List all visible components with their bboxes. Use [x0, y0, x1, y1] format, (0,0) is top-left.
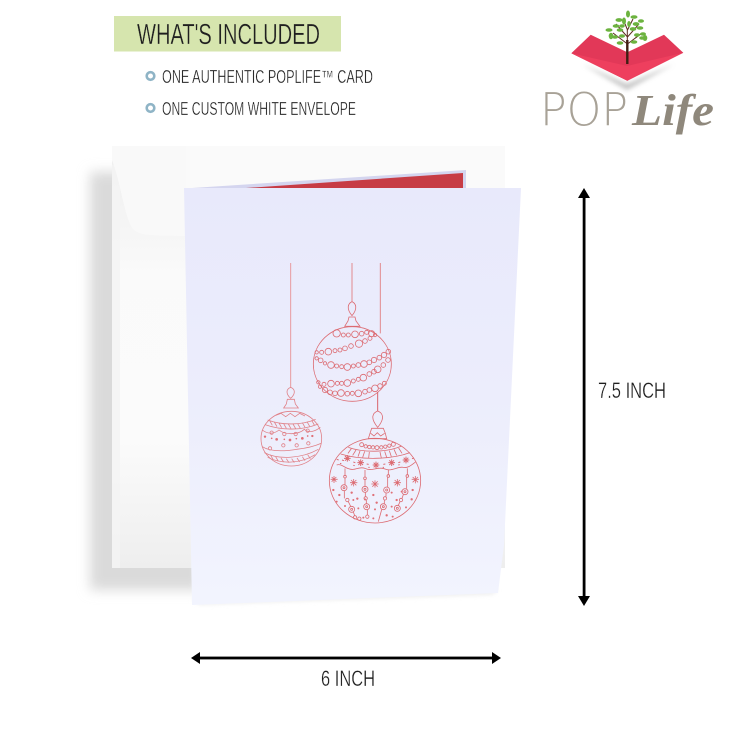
logo: PopLife [540, 10, 714, 136]
icon: book shadow [582, 64, 674, 90]
icon: tree [606, 10, 647, 64]
logo word: POP: POP [540, 84, 628, 136]
item: envelope [147, 99, 356, 119]
arrow: height [578, 188, 590, 606]
logo word: Life: Life [631, 86, 714, 135]
list: included items [147, 67, 373, 119]
card shadow [192, 590, 498, 604]
item: card [147, 67, 373, 87]
ornament: large snowflake ball [329, 392, 421, 523]
item: card: ONE AUTHENTIC POPLIFE™ CARD [162, 67, 373, 87]
red inner card [192, 170, 466, 188]
heading: what's included [114, 16, 341, 52]
ornament: top garland ball [313, 263, 391, 401]
envelope flap [112, 146, 186, 236]
label: 6 inch: 6 INCH [321, 666, 375, 691]
envelope shadow [90, 172, 202, 590]
illustration: ornaments [261, 263, 421, 523]
label: 7.5 inch: 7.5 INCH [598, 378, 666, 403]
icon: open red book [571, 35, 683, 81]
ornament: small left ball [261, 263, 322, 466]
envelope [112, 146, 505, 568]
greeting card [184, 188, 521, 605]
item: envelope: ONE CUSTOM WHITE ENVELOPE [162, 99, 356, 119]
heading: what's included: WHAT'S INCLUDED [137, 19, 320, 51]
arrow: width [191, 652, 501, 664]
